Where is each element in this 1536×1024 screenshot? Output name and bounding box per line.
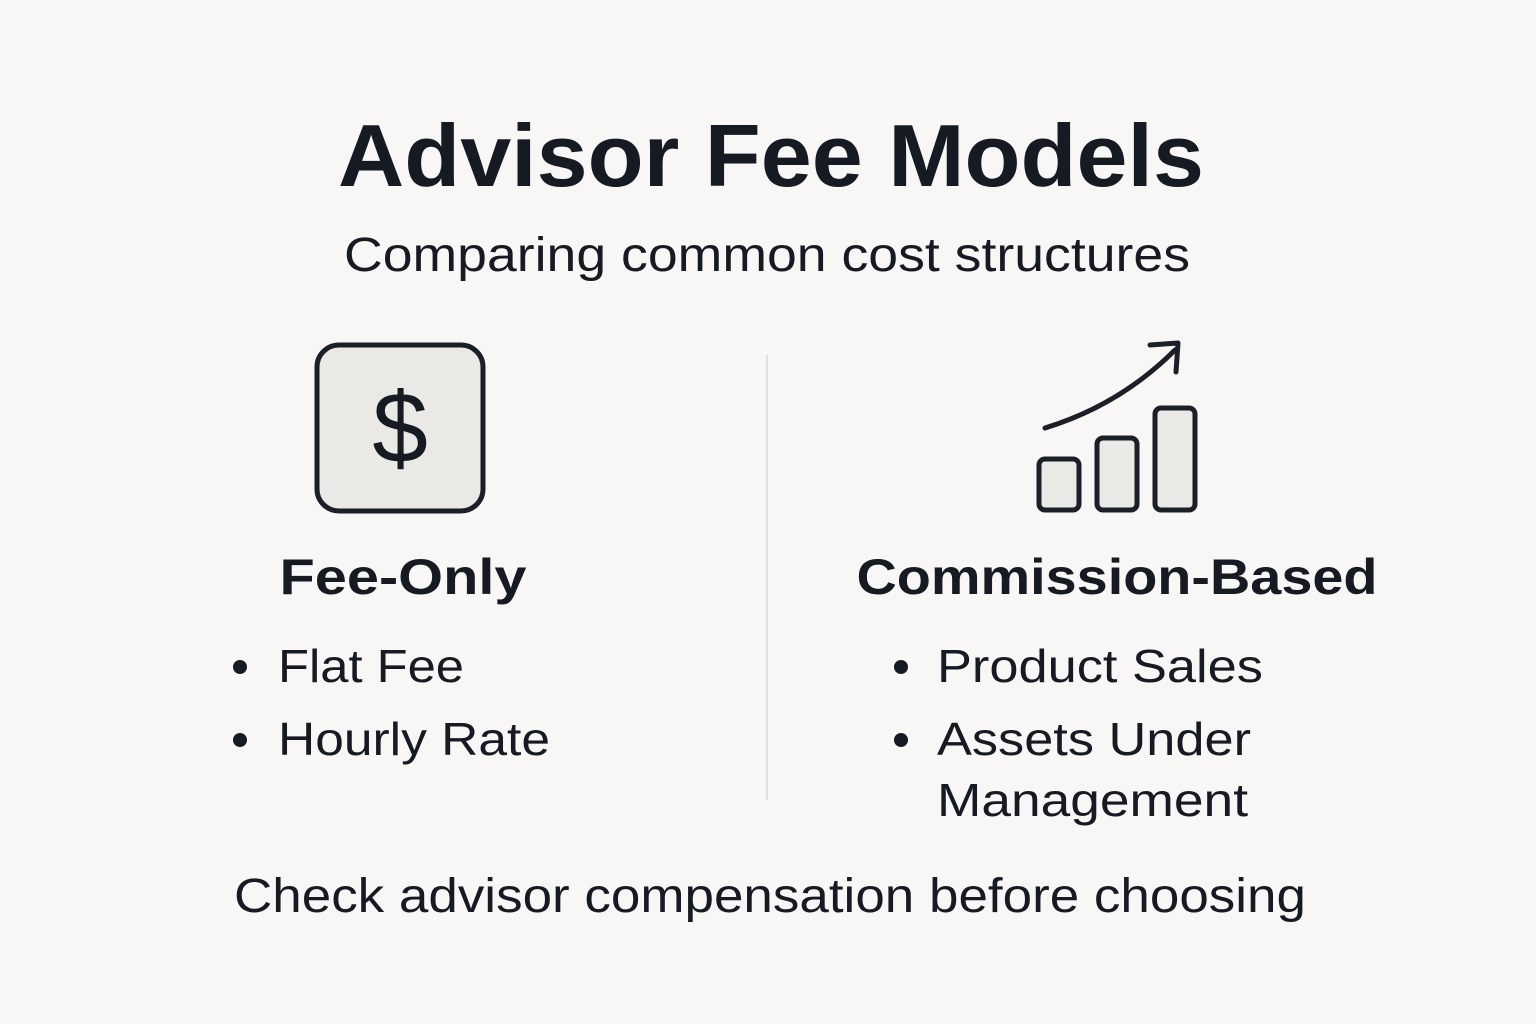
- subtitle: Comparing common cost structures: [344, 229, 1190, 282]
- icon: bar chart with arrow: [1039, 343, 1195, 510]
- list: commission items: Management: [937, 774, 1248, 826]
- heading: Fee-Only: Fee-Only: [280, 549, 527, 605]
- divider: [766, 355, 768, 800]
- list: fee-only items: Hourly Rate: [278, 713, 550, 765]
- icon: dollar box: [317, 345, 483, 511]
- title: Advisor Fee Models: [338, 106, 1204, 205]
- list: commission items: [894, 640, 1263, 826]
- list: commission items: Product Sales: [937, 640, 1263, 692]
- list: fee-only items: [233, 640, 550, 765]
- list: fee-only items: Flat Fee: [278, 640, 464, 692]
- footer note: Check advisor compensation before choosing: [234, 870, 1306, 923]
- icon: dollar box: $: [372, 372, 428, 484]
- heading: Commission-Based: Commission-Based: [856, 549, 1378, 605]
- list: commission items: Assets Under: [937, 713, 1251, 765]
